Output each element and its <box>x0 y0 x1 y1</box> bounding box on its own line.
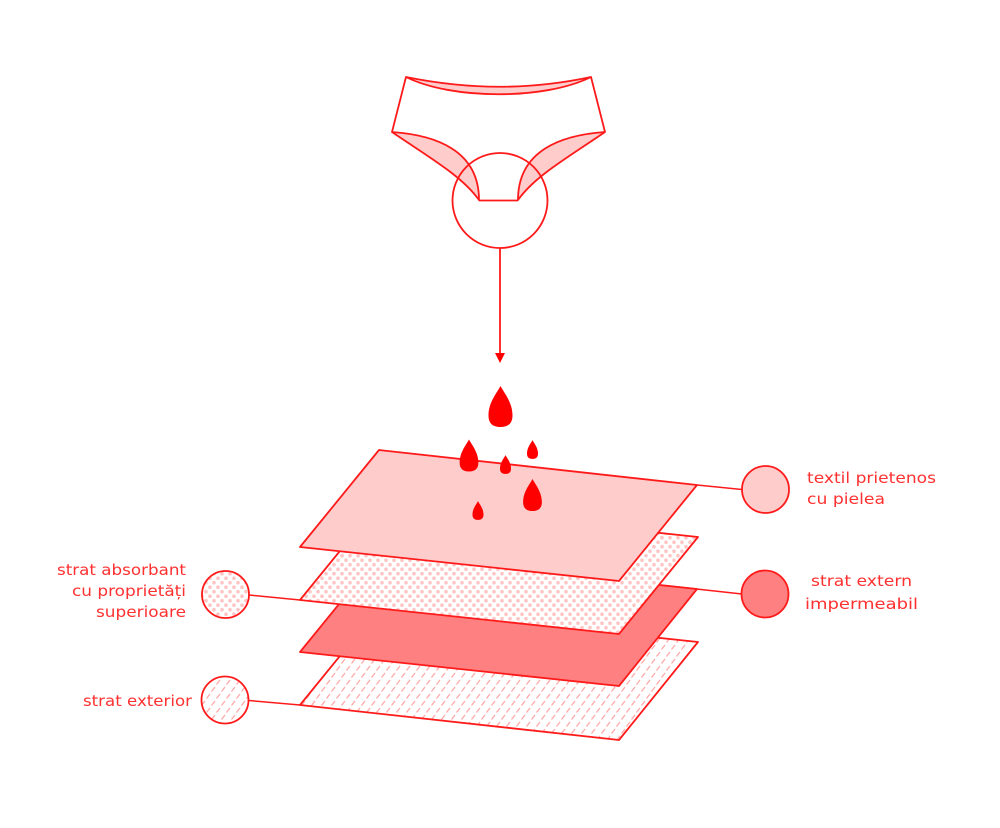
connector: absorbent <box>249 595 300 600</box>
layer: waterproof <box>300 555 697 686</box>
arrow <box>495 248 505 363</box>
layer: absorbent dots <box>300 503 698 634</box>
legend circle: textile <box>742 466 789 513</box>
connector: exterior <box>249 700 300 705</box>
legend circle: waterproof <box>742 570 788 618</box>
underwear illustration <box>392 77 605 200</box>
label: absorbent: cu proprietăți <box>72 582 186 600</box>
layer: outer hatched <box>300 608 698 740</box>
label: absorbent: strat absorbant <box>57 561 186 579</box>
label: textile: cu pielea <box>807 490 885 508</box>
layer: absorbent base <box>300 503 698 634</box>
legend circle: exterior <box>202 676 248 724</box>
connector: waterproof <box>660 585 742 594</box>
layer: skin friendly textile <box>300 450 697 581</box>
connector: textile <box>697 485 742 490</box>
label: exterior: strat exterior <box>83 692 193 710</box>
label: textile: textil prietenos <box>807 469 936 487</box>
label: absorbent: superioare <box>96 603 186 621</box>
drops <box>460 386 542 520</box>
label: waterproof: impermeabil <box>805 595 918 613</box>
legend circle: absorbent <box>202 571 249 618</box>
label: waterproof: strat extern <box>811 572 912 590</box>
magnifier circle <box>452 153 548 248</box>
